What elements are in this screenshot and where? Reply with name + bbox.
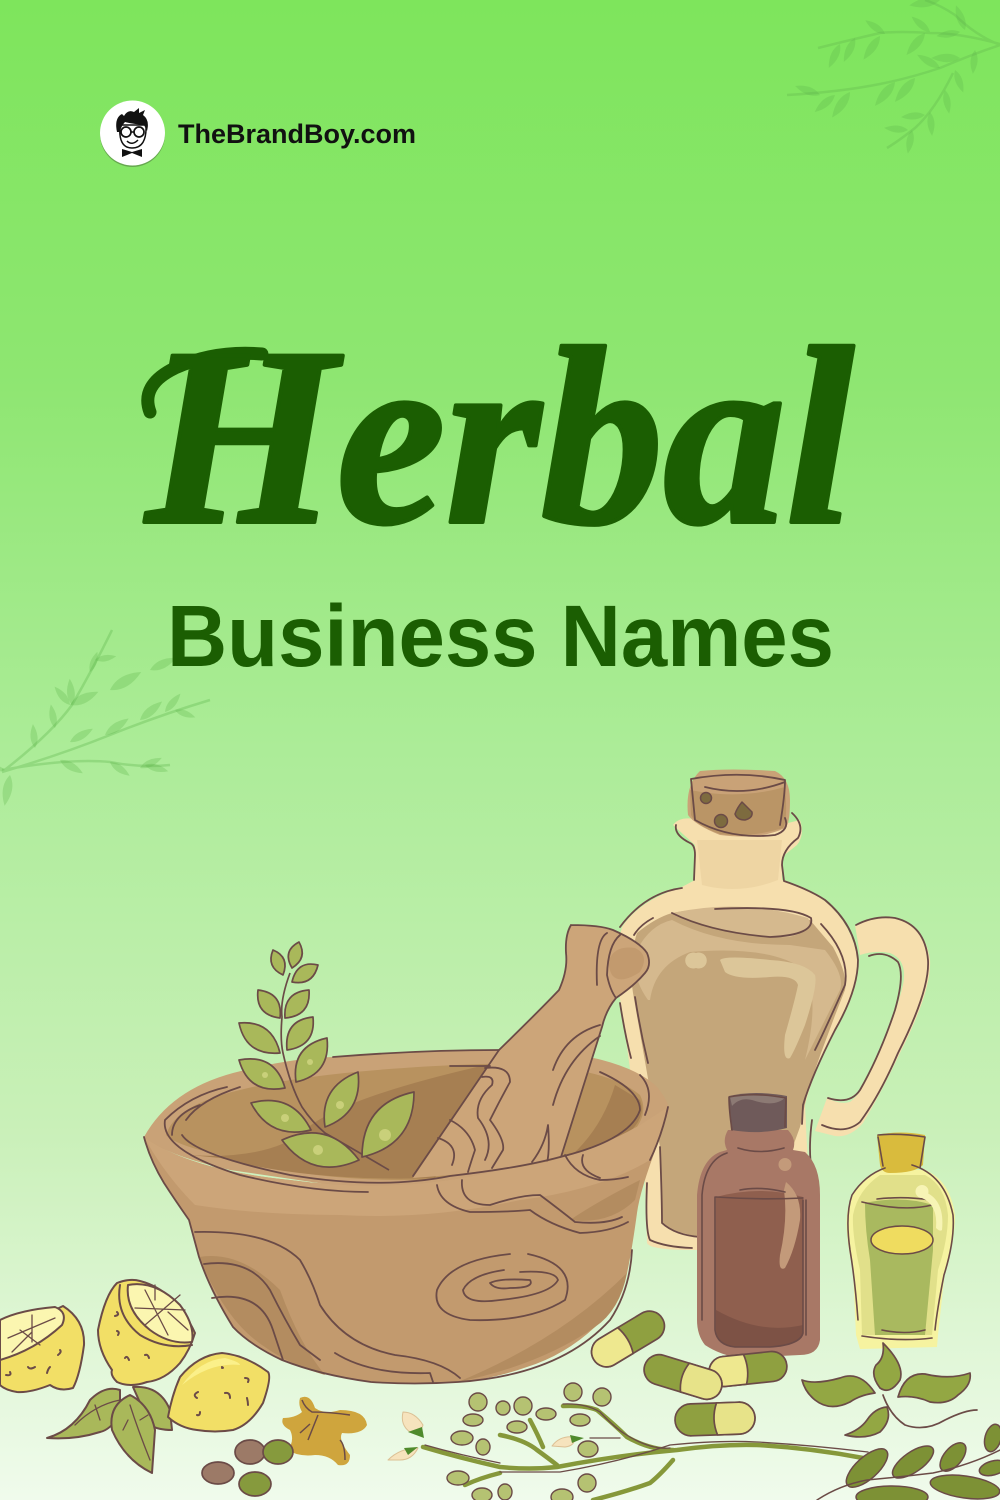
pestle xyxy=(413,925,649,1178)
bowl interior shadow xyxy=(190,1064,642,1179)
glass highlights xyxy=(685,952,816,1059)
yellow bottle highlight xyxy=(916,1185,942,1231)
yellow bottle cap xyxy=(877,1132,925,1173)
lemon half upper xyxy=(98,1280,195,1385)
illustration: large oil bottle with cork xyxy=(617,770,930,1250)
flowering branch xyxy=(388,1383,1000,1500)
whole lemon xyxy=(168,1353,269,1432)
logo wordmark: TheBrandBoy.com xyxy=(178,119,416,149)
brown bottle body xyxy=(697,1130,820,1358)
bowl wood grain lines xyxy=(144,1050,668,1384)
brown bottle highlight xyxy=(778,1158,800,1269)
bowl interior xyxy=(166,1064,643,1180)
bowl lower shade xyxy=(199,1180,640,1382)
flower buds xyxy=(388,1412,575,1460)
branch stems xyxy=(423,1406,863,1500)
cork spots xyxy=(700,792,752,828)
decorative sprig: top right xyxy=(787,0,1000,154)
yellow bottle inner tone xyxy=(853,1175,948,1335)
yellow bottle glass xyxy=(847,1170,955,1349)
bottle liquid xyxy=(631,908,846,1237)
lemon half left xyxy=(0,1306,84,1392)
bowl knot swirl xyxy=(436,1254,568,1320)
bowl back rim xyxy=(144,1050,669,1195)
oil xyxy=(865,1199,933,1335)
brown bottle liquid xyxy=(715,1191,803,1347)
pestle head tone xyxy=(609,948,644,979)
title swash on H xyxy=(148,353,262,412)
ginger root xyxy=(282,1397,367,1465)
bud calyx xyxy=(404,1427,584,1455)
leaf highlights xyxy=(262,1059,391,1155)
logo: TheBrandBoy xyxy=(100,100,416,167)
bottle handle xyxy=(815,917,930,1136)
dark olive leaves xyxy=(840,1422,1000,1500)
bottle outlines xyxy=(620,813,858,1248)
illustration: brown bottle xyxy=(697,1093,820,1358)
herb sprig in bowl xyxy=(239,942,414,1170)
brown bottle outlines xyxy=(702,1095,806,1347)
illustration: yellow bottle xyxy=(847,1132,955,1349)
pestle grain lines xyxy=(413,925,649,1176)
nuts and berries xyxy=(202,1440,293,1496)
cork xyxy=(688,770,790,836)
lower right thin stem xyxy=(817,1450,1000,1500)
logo badge xyxy=(100,100,165,167)
three leaf sprig xyxy=(802,1343,977,1437)
capsule four xyxy=(674,1402,756,1436)
branch round leaves xyxy=(447,1383,611,1500)
yellow bottle outlines xyxy=(848,1134,953,1340)
lemon halves and whole lemon xyxy=(0,1280,269,1473)
bowl front xyxy=(144,1107,668,1384)
liquid surface and side tone xyxy=(635,907,841,1060)
bowl lip band xyxy=(144,1107,668,1216)
capsule one xyxy=(586,1306,670,1372)
oil oval xyxy=(871,1226,933,1254)
bottle glass xyxy=(617,818,858,1250)
capsules xyxy=(586,1306,788,1436)
capsule three xyxy=(640,1351,726,1403)
title: Herbal xyxy=(144,296,854,577)
bottle neck shade xyxy=(697,840,782,889)
brown liquid shade xyxy=(716,1310,803,1347)
title word: Herbal xyxy=(144,296,854,577)
illustration: mortar and pestle xyxy=(144,925,669,1384)
capsule two xyxy=(708,1350,788,1388)
subtitle: Business Names: Business Names xyxy=(167,588,834,685)
brown bottle cap xyxy=(729,1093,787,1132)
decorative sprig: left xyxy=(0,630,210,807)
basil leaves xyxy=(47,1387,172,1473)
sprig stem xyxy=(281,973,389,1170)
